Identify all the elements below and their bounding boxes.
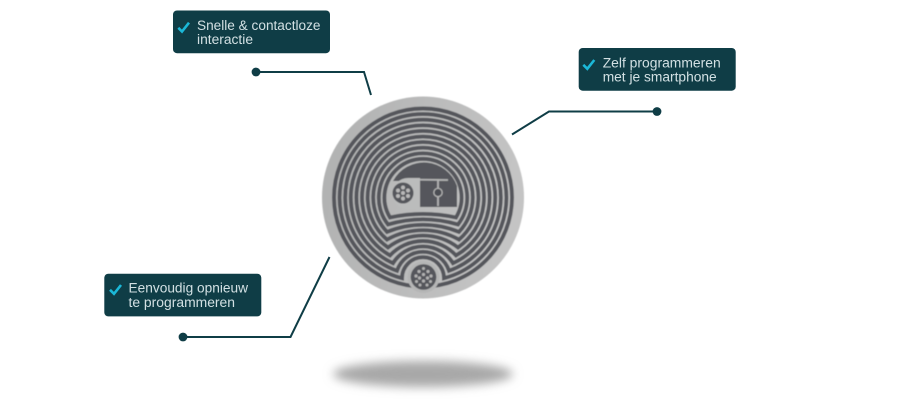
- callout text: [128, 281, 249, 311]
- chip contact ring: [434, 188, 442, 197]
- NFC tag disc: [322, 96, 524, 298]
- callout: smartphone: [579, 48, 736, 91]
- callout text: met je smartphone: [603, 70, 717, 86]
- callout text: interactie: [197, 32, 253, 48]
- bottom contact pad: [408, 261, 440, 293]
- callout text: Zelf programmeren: [603, 55, 721, 71]
- icon: check: [583, 60, 594, 69]
- callout text: Eenvoudig opnieuw: [128, 281, 249, 297]
- icon: check: [110, 285, 121, 294]
- callout text: Snelle & contactloze: [197, 18, 321, 34]
- callout box: [104, 274, 261, 316]
- callout: reprogram: [104, 274, 261, 316]
- callout: contactless: [173, 10, 330, 53]
- icon: check: [178, 23, 189, 32]
- callout text: [603, 55, 721, 86]
- callout text: te programmeren: [128, 295, 235, 311]
- left contact pad: [392, 182, 414, 204]
- callout box: [579, 48, 736, 91]
- callout box: [173, 10, 330, 53]
- connector: top right: [512, 107, 661, 134]
- connector: bottom left: [179, 257, 330, 341]
- antenna coil: [334, 108, 512, 286]
- callout text: [197, 18, 321, 48]
- chip block: [392, 162, 457, 209]
- ground shadow: [333, 361, 513, 387]
- chip traces: [405, 180, 448, 206]
- left capsule: [392, 178, 420, 209]
- connector: top left: [252, 68, 371, 95]
- chip dome: [393, 162, 457, 207]
- disc base: [322, 96, 524, 298]
